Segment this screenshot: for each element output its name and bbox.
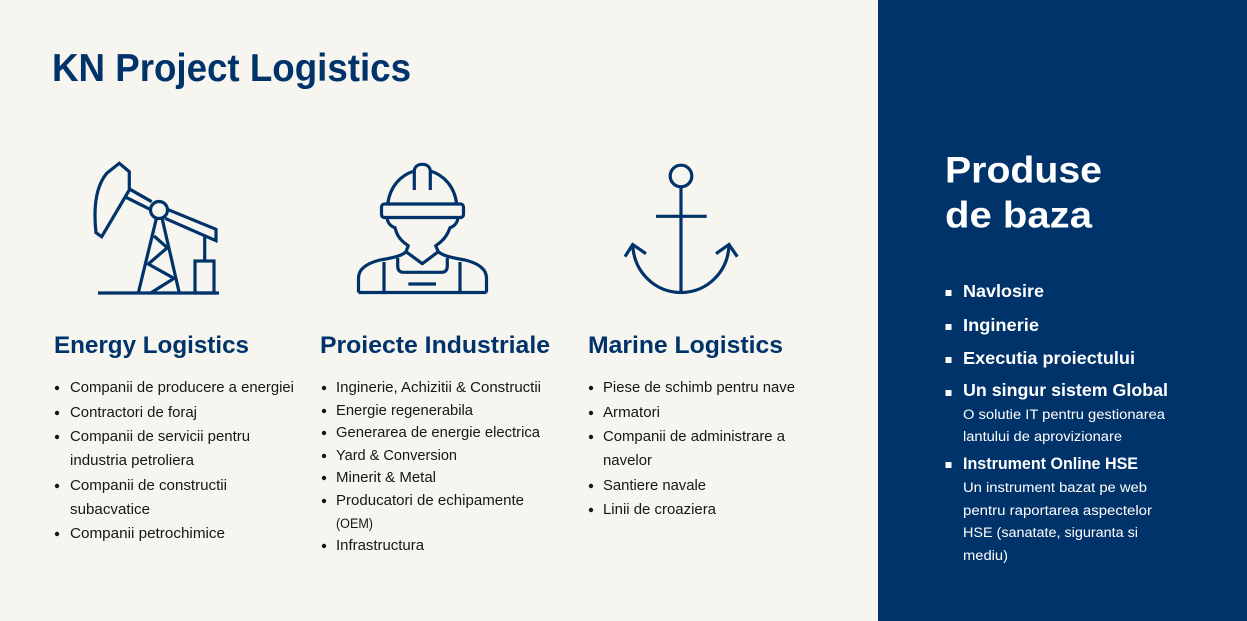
list: HSE (sanatate, siguranta si [963,525,1138,541]
icon: oil pump [95,163,219,293]
list: Producatori de echipamente [336,493,524,509]
list: Navlosire [963,281,1044,301]
list: (OEM) [336,516,373,531]
panel: proiecte industriale [320,332,550,554]
heading: Energy Logistics [54,332,249,359]
list: Inginerie [963,315,1039,335]
list: Infrastructura [336,538,425,554]
heading: Marine Logistics [588,332,783,359]
panel: produse de baza [878,0,1247,621]
list [589,380,795,518]
list: Yard & Conversion [336,448,457,464]
list: Energie regenerabila [336,403,474,419]
list: Companii de producere a energiei [70,380,294,396]
list [322,380,541,554]
list: Un instrument bazat pe web [963,480,1147,496]
title: KN Project Logistics [52,47,411,90]
list: subacvatice [70,502,150,518]
icon: worker with hard hat [358,164,486,292]
list: Un singur sistem Global [963,380,1168,400]
heading [945,150,1102,236]
list: Contractori de foraj [70,405,197,421]
list: Companii de administrare a [603,429,786,445]
list: Linii de croaziera [603,502,717,518]
list: Piese de schimb pentru nave [603,380,795,396]
list: Armatori [603,405,660,421]
list: Executia proiectului [963,348,1135,368]
heading: Proiecte Industriale [320,332,550,359]
list: Santiere navale [603,478,706,494]
list: Companii petrochimice [70,526,225,542]
list: Instrument Online HSE [963,455,1138,473]
list [946,281,1168,564]
list [55,380,294,542]
list: lantului de aprovizionare [963,429,1122,445]
list: Generarea de energie electrica [336,425,541,441]
icon: anchor [625,165,737,293]
list: mediu) [963,548,1008,564]
heading: Produse [945,150,1102,190]
list: O solutie IT pentru gestionarea [963,407,1165,423]
panel: energy logistics [54,332,294,542]
list: Inginerie, Achizitii & Constructii [336,380,541,396]
list: Minerit & Metal [336,470,436,486]
list: navelor [603,453,652,469]
list: Companii de constructii [70,478,227,494]
list: industria petroliera [70,453,195,469]
heading: de baza [945,194,1092,236]
list: pentru raportarea aspectelor [963,503,1152,519]
panel: marine logistics [588,332,795,518]
list: Companii de servicii pentru [70,429,250,445]
